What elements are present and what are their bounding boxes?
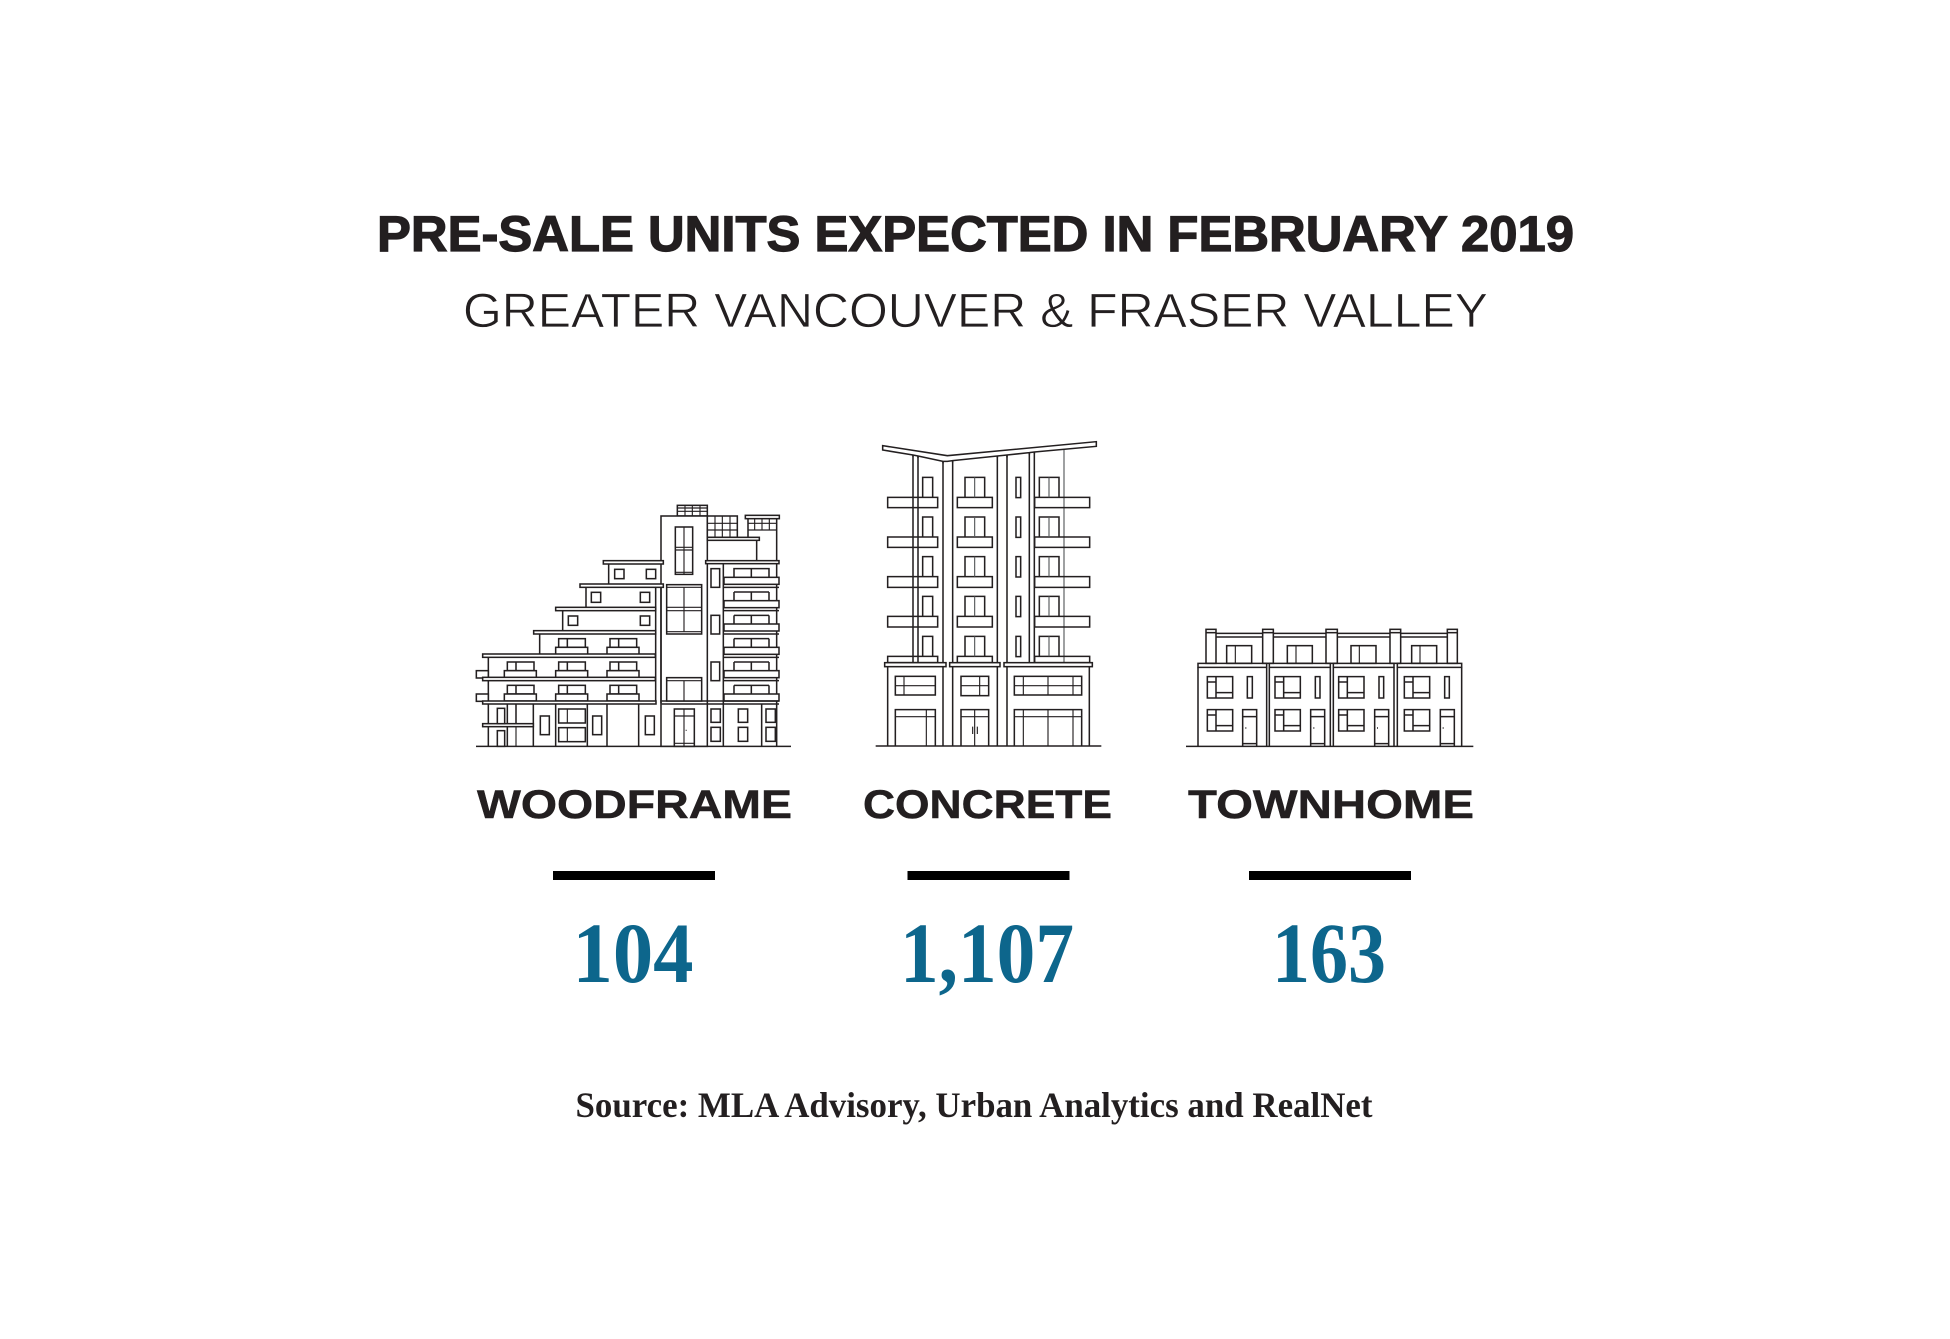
value: concrete: 1,107: [900, 905, 1074, 1001]
value: townhome: 163: [1272, 905, 1386, 1001]
source note: Source: MLA Advisory, Urban Analytics and RealNet: [576, 1085, 1373, 1125]
divider bar: townhome: [1249, 871, 1411, 880]
label: townhome: TOWNHOME: [1188, 783, 1474, 827]
label: concrete: CONCRETE: [863, 783, 1112, 827]
panel: concrete: [863, 442, 1112, 1001]
divider bar: concrete: [908, 871, 1070, 880]
value: woodframe: 104: [572, 905, 694, 1001]
icon: concrete building: [876, 442, 1101, 746]
label: woodframe: WOODFRAME: [477, 783, 792, 827]
panel: woodframe: [476, 505, 792, 1001]
icon: woodframe building: [476, 505, 791, 746]
icon: townhome building: [1186, 629, 1473, 746]
divider bar: woodframe: [553, 871, 715, 880]
title: PRE-SALE UNITS EXPECTED IN FEBRUARY 2019: [377, 206, 1574, 262]
subtitle: GREATER VANCOUVER & FRASER VALLEY: [463, 285, 1488, 338]
panel: townhome: [1186, 629, 1474, 1001]
